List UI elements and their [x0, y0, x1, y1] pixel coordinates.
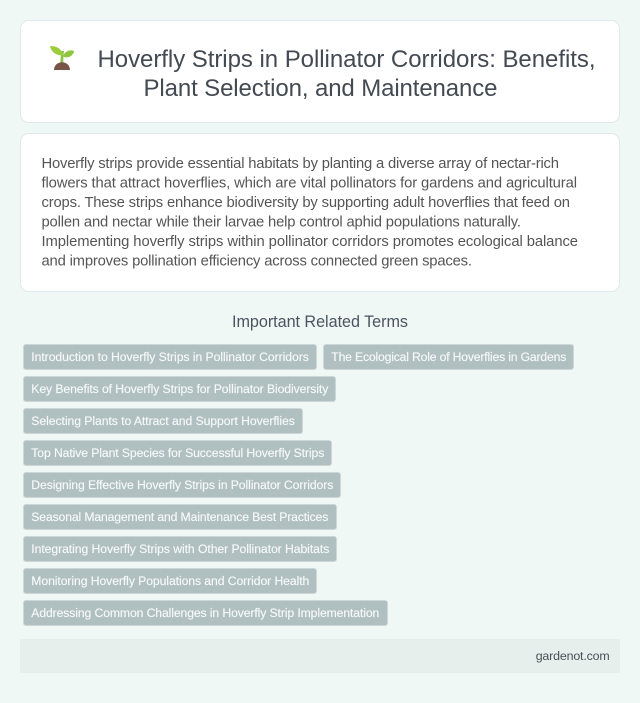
footer: gardenot.com	[536, 649, 610, 663]
chip: challenges	[24, 600, 388, 626]
chip: seasonal	[24, 504, 336, 530]
text block: description: pollen and nectar while their larvae help control aphid populations naturally.	[42, 214, 521, 230]
title	[98, 46, 596, 102]
chip: introduction: Introduction to Hoverfly Strips in Pollinator Corridors	[31, 350, 309, 364]
chip: seasonal: Seasonal Management and Maintenance Best Practices	[31, 510, 328, 524]
chip: challenges: Addressing Common Challenges in Hoverfly Strip Implementation	[31, 606, 379, 620]
text block: description: flowers that attract hoverflies, which are vital pollinators for gardens and agricultural	[42, 176, 577, 192]
panel: description card	[20, 134, 620, 292]
chip: monitoring: Monitoring Hoverfly Populations and Corridor Health	[31, 574, 309, 588]
chip: introduction	[24, 344, 316, 370]
icon: seedling	[50, 46, 74, 70]
title: Hoverfly Strips in Pollinator Corridors: Benefits,	[98, 46, 596, 73]
text block: description: crops. These strips enhance biodiversity by supporting adult hoverflies that feed on	[42, 195, 570, 211]
chip: selecting plants	[24, 408, 302, 434]
footer	[20, 639, 620, 673]
chip: integrating	[24, 536, 336, 562]
chip: ecological role: The Ecological Role of Hoverflies in Gardens	[331, 350, 566, 364]
text block: description: Implementing hoverfly strips within pollinator corridors promotes ecological balance	[42, 234, 578, 250]
heading: related terms: Important Related Terms	[232, 313, 408, 331]
chip: integrating: Integrating Hoverfly Strips with Other Pollinator Habitats	[31, 542, 329, 556]
chip: key benefits: Key Benefits of Hoverfly Strips for Pollinator Biodiversity	[31, 382, 329, 396]
chip: native species	[24, 440, 332, 466]
panel: header card	[20, 20, 620, 122]
chip: ecological role	[324, 344, 574, 370]
chip: key benefits	[24, 376, 336, 402]
chip: designing	[24, 472, 340, 498]
title: Plant Selection, and Maintenance	[144, 75, 498, 102]
text block: description: Hoverfly strips provide essential habitats by planting a diverse array of nectar-rich	[42, 156, 559, 172]
text block: description	[42, 156, 578, 270]
chip: monitoring	[24, 568, 316, 594]
text block: description: and improves pollination efficiency across connected green spaces.	[42, 254, 472, 270]
chip: selecting plants: Selecting Plants to Attract and Support Hoverflies	[31, 414, 295, 428]
chip: designing: Designing Effective Hoverfly Strips in Pollinator Corridors	[31, 478, 333, 492]
chip: native species: Top Native Plant Species for Successful Hoverfly Strips	[31, 446, 324, 460]
